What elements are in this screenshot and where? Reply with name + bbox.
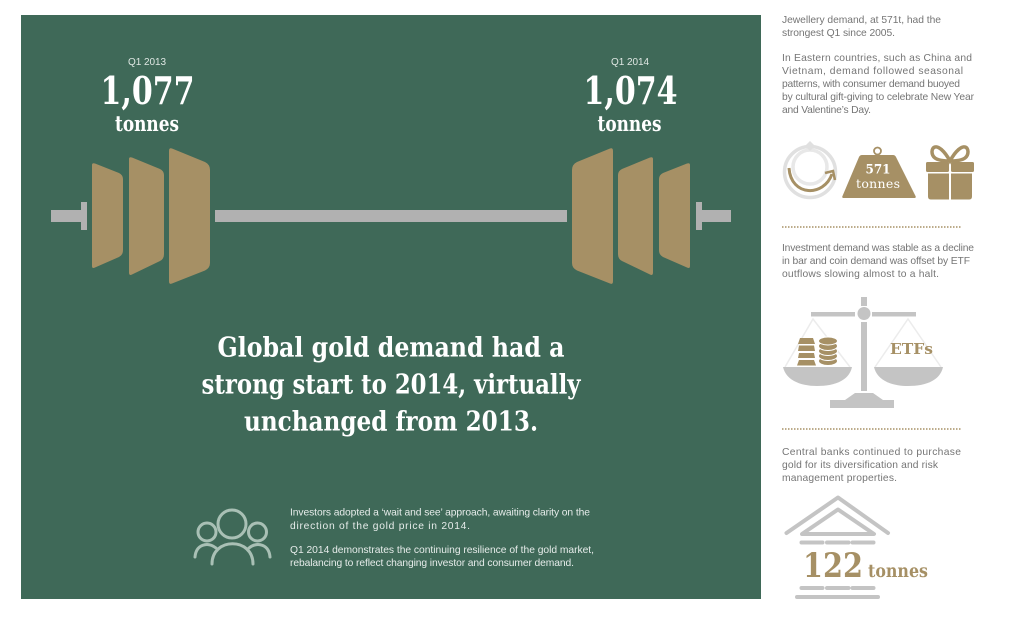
label: Q1 2014 total <box>584 57 678 136</box>
icon: central bank building with 122 tonnes: 122 <box>803 546 863 586</box>
icon: central bank building with 122 tonnes <box>786 498 928 597</box>
divider <box>782 428 962 430</box>
divider <box>782 226 962 228</box>
text block: investor commentary <box>290 508 594 569</box>
icon: balance scale <box>783 297 943 408</box>
text block: investment demand: Investment demand was stable as a decline <box>782 243 974 254</box>
text block: jewellery demand: Jewellery demand, at 571t, had the <box>782 15 941 26</box>
text block: central banks <box>782 447 961 484</box>
icon: balance scale: ETFs <box>890 340 933 358</box>
text block: investor commentary: direction of the gold price in 2014. <box>290 521 470 532</box>
text block: jewellery demand: In Eastern countries, such as China and <box>782 53 972 64</box>
icon: 571 tonnes weight: 571 <box>866 162 890 178</box>
text block: central banks: Central banks continued to purchase <box>782 447 961 458</box>
icon: 571 tonnes weight <box>842 148 916 198</box>
text block: jewellery demand <box>782 15 975 116</box>
text block: jewellery demand: patterns, with consumer demand buoyed <box>782 79 960 90</box>
panel: green main panel <box>21 15 761 599</box>
icon: necklace with arrow <box>784 141 836 198</box>
label: Q1 2014 total: Q1 2014 <box>611 57 649 68</box>
label: Q1 2013 total <box>100 57 194 136</box>
text block: investor commentary: Investors adopted a ‘wait and see’ approach, awaiting clarity on the <box>290 508 590 518</box>
label: Q1 2014 total: tonnes <box>598 111 662 136</box>
text block: central banks: management properties. <box>782 473 897 484</box>
heading: headline: unchanged from 2013. <box>244 406 538 438</box>
text block: investment demand: in bar and coin demand was offset by ETF <box>782 256 970 267</box>
heading: headline: Global gold demand had a <box>218 332 564 364</box>
text block: jewellery demand: by cultural gift-giving to celebrate New Year <box>782 92 975 103</box>
text block: investment demand: outflows slowing almost to a halt. <box>782 269 939 280</box>
label: Q1 2013 total: Q1 2013 <box>128 57 166 68</box>
heading: headline: strong start to 2014, virtually <box>202 370 582 400</box>
label: Q1 2013 total: 1,077 <box>100 68 194 113</box>
text block: investor commentary: rebalancing to reflect changing investor and consumer demand. <box>290 558 574 569</box>
icon: group of people <box>195 510 270 564</box>
icon: gift box <box>926 147 974 200</box>
text block: central banks: gold for its diversification and risk <box>782 460 939 471</box>
label: Q1 2013 total: tonnes <box>115 111 179 136</box>
text block: jewellery demand: and Valentine’s Day. <box>782 105 871 116</box>
label: Q1 2014 total: 1,074 <box>584 68 678 113</box>
heading: headline <box>202 332 582 438</box>
text block: jewellery demand: Vietnam, demand followed seasonal <box>782 66 963 77</box>
text block: jewellery demand: strongest Q1 since 2005. <box>782 28 895 39</box>
text block: investor commentary: Q1 2014 demonstrates the continuing resilience of the gold market, <box>290 545 594 556</box>
icon: 571 tonnes weight: tonnes <box>856 176 900 191</box>
text block: investment demand <box>782 243 974 280</box>
chart: barbell balance <box>51 148 731 284</box>
icon: central bank building with 122 tonnes: tonnes <box>868 562 928 582</box>
